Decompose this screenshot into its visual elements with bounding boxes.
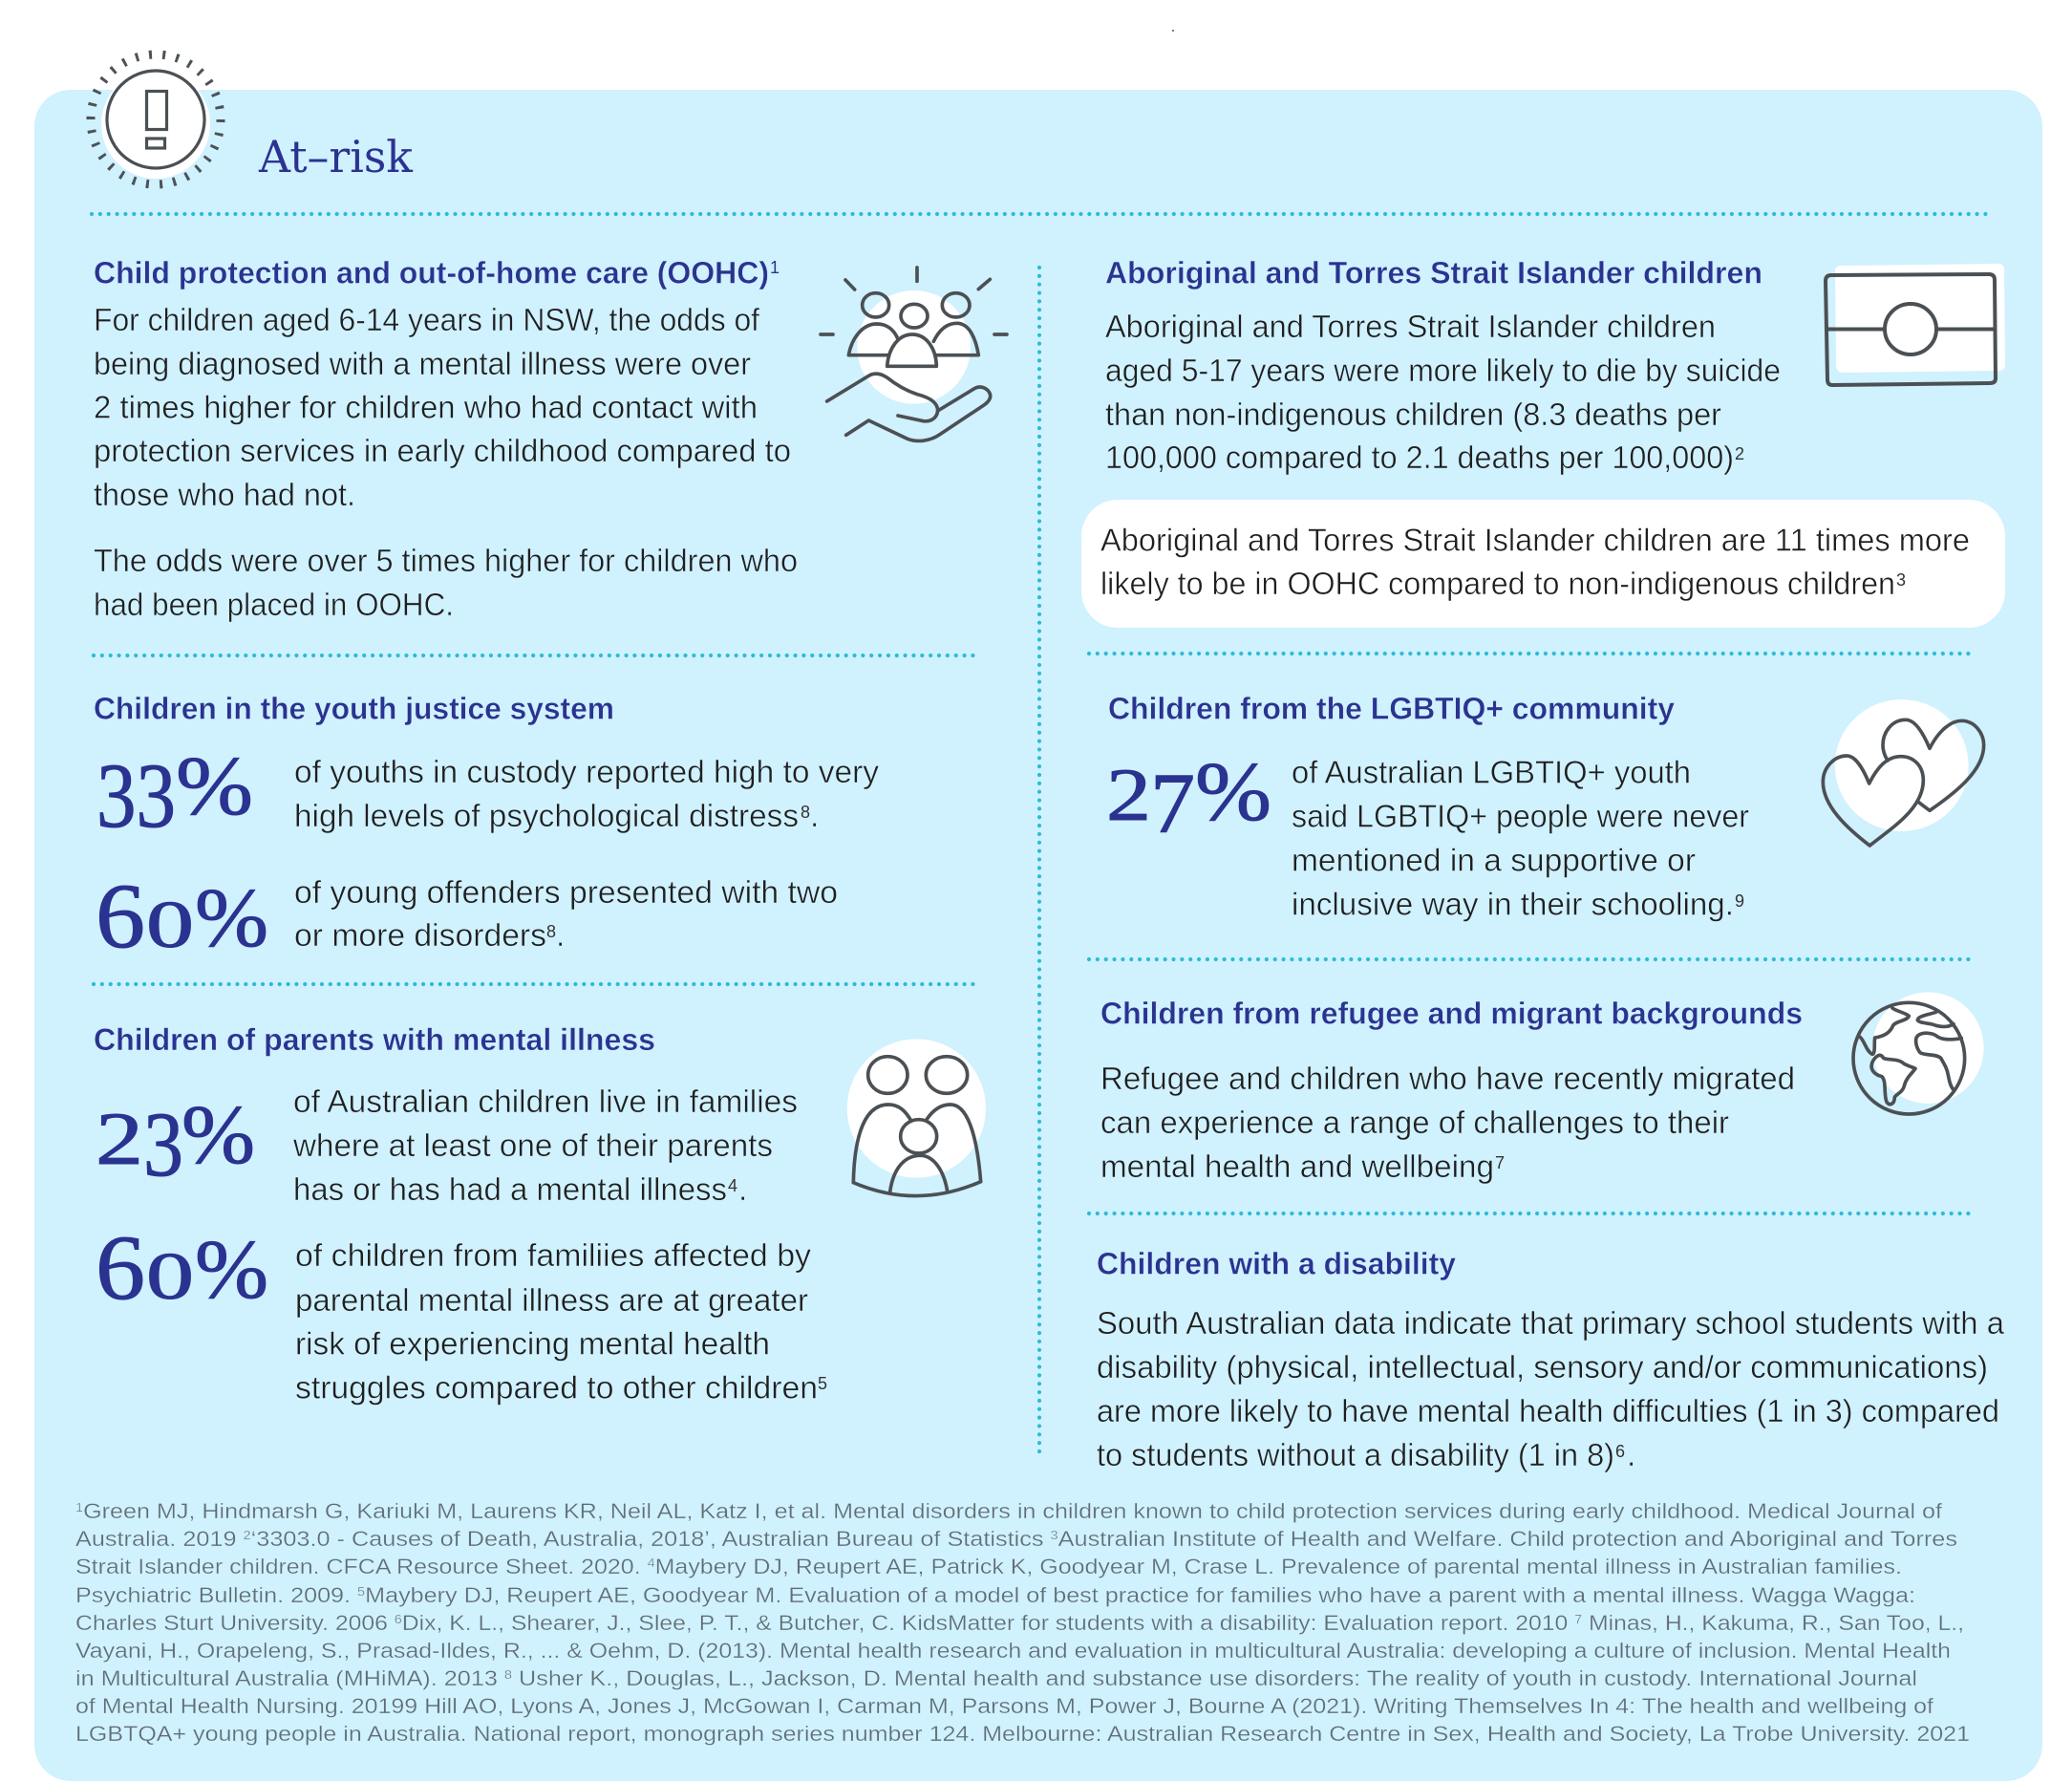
- callout: 11 times more likely: Aboriginal and Torres Strait Islander children are 11 times more: [1100, 524, 1970, 558]
- panel: child protection and OOHC: [94, 256, 798, 623]
- stat: 60% offenders: %: [195, 872, 268, 965]
- text: suicide comparison: than non-indigenous children (8.3 deaths per: [1105, 397, 1721, 433]
- references: 5: [357, 1584, 365, 1599]
- references: Strait Islander children. CFCA Resource Sheet. 2020.: [75, 1555, 585, 1578]
- panel: Aboriginal and Torres Strait Islander children: [1081, 256, 2005, 628]
- text: odds for contact with protection services: protection services in early childhood compared to: [94, 434, 791, 469]
- stat: 33%: %: [176, 741, 253, 833]
- text: 60% families description: 5: [818, 1374, 827, 1393]
- text: odds for OOHC: had been placed in OOHC.: [94, 588, 454, 623]
- small mark at top of page: [1172, 30, 1174, 32]
- text: 60% offenders description: 8: [546, 922, 556, 941]
- text: 33% description: .: [810, 799, 819, 834]
- panel: children in the youth justice system: [94, 692, 879, 967]
- panel: children with a disability: [1097, 1246, 2004, 1473]
- references: [75, 1499, 1970, 1746]
- text: South Australian data: are more likely to have mental health difficulties (1 in 3) compared: [1097, 1394, 1999, 1429]
- stat: 60% families: %: [195, 1224, 268, 1317]
- references: in Multicultural Australia (MHiMA). 2013: [75, 1666, 452, 1690]
- references: Maybery DJ, Reupert AE, Patrick K, Goodyear M, Crase L. Prevalence of parental mental illness in Australian families.: [655, 1555, 1902, 1578]
- text: odds for OOHC: The odds were over 5 times higher for children who: [94, 544, 798, 579]
- text: 23% description: of Australian children live in families: [293, 1084, 798, 1120]
- title: At–risk: [258, 131, 414, 182]
- references: Minas, H., Kakuma, R., San Too, L.,: [1582, 1611, 1964, 1635]
- stat: 23%: %: [182, 1089, 255, 1182]
- text: 23% description: [292, 1084, 798, 1208]
- references: 3: [1051, 1528, 1058, 1542]
- text: odds for contact with protection services: For children aged 6-14 years in NSW, the odds of: [94, 303, 760, 338]
- text: 60% offenders description: or more disorders: [294, 918, 546, 954]
- text: refugee challenges: [1100, 1062, 1795, 1185]
- text: odds for OOHC: [94, 544, 798, 623]
- text: 27% description: said LGBTIQ+ people were never: [1292, 799, 1749, 835]
- callout: 11 times more likely: likely to be in OOHC compared to non-indigenous children: [1100, 567, 1895, 602]
- text: refugee challenges: Refugee and children who have recently migrated: [1100, 1062, 1795, 1097]
- references: Australia. 2019: [75, 1527, 219, 1551]
- heading: refugee and migrant: Children from refugee and migrant backgrounds: [1100, 996, 1803, 1030]
- stat: 27%: [1106, 746, 1271, 851]
- references: Dix, K. L., Shearer, J., Slee, P. T., & Butcher, C. KidsMatter for students with a disability: Evaluation report. 2010: [402, 1611, 1574, 1635]
- references: Charles Sturt University. 2006: [75, 1611, 359, 1635]
- stat: 27%: %: [1195, 746, 1271, 839]
- text: 33% description: [294, 755, 879, 834]
- text: 23% description: 4: [728, 1176, 737, 1195]
- text: 27% description: mentioned in a supportive or: [1292, 843, 1696, 879]
- text: 33% description: high levels of psychological distress: [294, 799, 799, 834]
- text: suicide comparison: 2: [1735, 444, 1744, 463]
- text: 23% description: .: [738, 1172, 747, 1208]
- text: 60% offenders description: of young offenders presented with two: [294, 875, 838, 911]
- text: 60% families description: parental mental illness are at greater: [295, 1283, 808, 1319]
- icon: family of parents and child: [847, 1039, 986, 1196]
- stat: 23%: 3: [143, 1093, 183, 1195]
- stat: 60% offenders: 6: [96, 865, 145, 967]
- references: of Mental Health Nursing. 20199 Hill AO, Lyons A, Jones J, McGowan I, Carman M, Parsons M, Power J, Bourne A (2021). Writing Themselves In 4: The health and wellbeing of: [75, 1694, 1934, 1718]
- text: 23% description: has or has had a mental illness: [293, 1172, 727, 1208]
- text: odds for contact with protection services: those who had not.: [94, 478, 355, 513]
- icon: two hearts: [1823, 699, 1984, 846]
- stat: 33%: 33: [96, 744, 176, 847]
- text: 60% families description: of children from familiies affected by: [295, 1238, 811, 1274]
- heading: youth justice: Children in the youth justice system: [94, 692, 614, 726]
- panel: children from refugee and migrant backgrounds: [1100, 996, 1803, 1185]
- references: 2: [244, 1528, 251, 1542]
- icon: warning exclamation: [91, 54, 221, 184]
- references: Vayani, H., Orapeleng, S., Prasad-Ildes, R., ... & Oehm, D. (2013). Mental health research and evaluation in multicultural Australia: developing a culture of inclusion. Mental Health: [75, 1639, 1951, 1663]
- text: 27% description: of Australian LGBTIQ+ youth: [1292, 755, 1691, 791]
- text: South Australian data: 6: [1615, 1442, 1625, 1461]
- heading: disability: Children with a disability: [1097, 1246, 1456, 1280]
- text: 23% description: where at least one of their parents: [292, 1128, 773, 1164]
- stat: 60% families: 6: [96, 1216, 145, 1319]
- text: suicide comparison: 100,000 compared to 2.1 deaths per 100,000): [1105, 440, 1734, 476]
- text: South Australian data: to students without a disability (1 in 8): [1097, 1438, 1614, 1473]
- icon: people held in a hand: [821, 268, 1007, 440]
- text: odds for contact with protection services: being diagnosed with a mental illness were over: [94, 347, 751, 382]
- references: Usher K., Douglas, L., Jackson, D. Mental health and substance use disorders: The reality of youth in custody. International Journal: [512, 1666, 1917, 1690]
- stat: 60% families: [96, 1216, 268, 1319]
- text: refugee challenges: can experience a range of challenges to their: [1100, 1106, 1729, 1141]
- footnote marker 1: 1: [770, 258, 780, 277]
- stat: 23%: 2: [96, 1097, 143, 1180]
- heading: LGBTIQ+: Children from the LGBTIQ+ community: [1108, 692, 1675, 726]
- text: South Australian data: South Australian data indicate that primary school students with a: [1097, 1306, 2004, 1342]
- text: suicide comparison: aged 5-17 years were more likely to die by suicide: [1105, 354, 1781, 389]
- text: South Australian data: .: [1627, 1438, 1635, 1473]
- panel: children from the LGBTIQ+ community: [1106, 692, 1749, 923]
- callout: 11 times more likely: [1081, 500, 2005, 628]
- text: 27% description: inclusive way in their schooling.: [1292, 887, 1734, 923]
- text: South Australian data: [1097, 1306, 2004, 1473]
- stat: 27%: 2: [1106, 753, 1151, 836]
- text: 60% offenders description: [294, 875, 838, 954]
- text: suicide comparison: [1105, 310, 1781, 476]
- references: 6: [395, 1612, 402, 1626]
- text: 60% families description: risk of experiencing mental health: [295, 1326, 770, 1363]
- text: 27% description: [1292, 755, 1749, 923]
- text: odds for contact with protection services: 2 times higher for children who had contact with: [94, 390, 758, 426]
- stat: 23%: [96, 1089, 255, 1195]
- text: refugee challenges: 7: [1495, 1153, 1505, 1172]
- references: 7: [1574, 1612, 1582, 1626]
- text: 33% description: 8: [801, 803, 810, 822]
- text: 33% description: of youths in custody reported high to very: [294, 755, 879, 790]
- heading: Aboriginal and Torres Strait Islander children: Aboriginal and Torres Strait Islander children: [1105, 256, 1762, 290]
- heading: child protection: Child protection and out-of-home care (OOHC): [94, 256, 769, 290]
- text: South Australian data: disability (physical, intellectual, sensory and/or communications): [1097, 1350, 1988, 1385]
- stat: 27%: 7: [1150, 757, 1195, 851]
- text: odds for contact with protection services: [94, 303, 791, 513]
- stat: 60% offenders: 0: [146, 889, 194, 962]
- icon: Aboriginal flag: [1826, 264, 2005, 385]
- references: LGBTQA+ young people in Australia. National report, monograph series number 124. Melbourne: Australian Research Centre in Sex, Health and Society, La Trobe University. 2021: [75, 1722, 1970, 1746]
- references: ‘3303.0 - Causes of Death, Australia, 2018’, Australian Bureau of Statistics: [251, 1527, 1051, 1551]
- text: 27% description: 9: [1735, 891, 1744, 911]
- references: 8: [504, 1667, 512, 1682]
- references: Maybery DJ, Reupert AE, Goodyear M. Evaluation of a model of best practice for families who have a parent with a mental illness. Wagga Wagga:: [365, 1583, 1915, 1607]
- text: 60% families description: [295, 1238, 827, 1406]
- text: 60% offenders description: .: [556, 918, 565, 954]
- stat: 60% families: 0: [146, 1240, 194, 1314]
- text: suicide comparison: Aboriginal and Torres Strait Islander children: [1105, 310, 1716, 345]
- text: 60% families description: struggles compared to other children: [295, 1370, 818, 1406]
- icon: globe: [1853, 992, 1984, 1114]
- references: Australian Institute of Health and Welfare. Child protection and Aboriginal and Torres: [1058, 1527, 1957, 1551]
- text: refugee challenges: mental health and wellbeing: [1100, 1149, 1494, 1185]
- panel: children of parents with mental illness: [94, 1022, 827, 1406]
- stat: 33%: [96, 741, 253, 847]
- stat: 60% offenders: [96, 865, 268, 967]
- references: 1: [75, 1500, 83, 1514]
- references: 4: [648, 1556, 655, 1570]
- callout: 11 times more likely: 3: [1896, 570, 1906, 590]
- heading: parents with mental illness: Children of parents with mental illness: [94, 1022, 655, 1057]
- references: Psychiatric Bulletin. 2009.: [75, 1583, 322, 1607]
- references: Green MJ, Hindmarsh G, Kariuki M, Laurens KR, Neil AL, Katz I, et al. Mental disorders in children known to child protection services during early childhood. Medical Journal of: [83, 1499, 1943, 1523]
